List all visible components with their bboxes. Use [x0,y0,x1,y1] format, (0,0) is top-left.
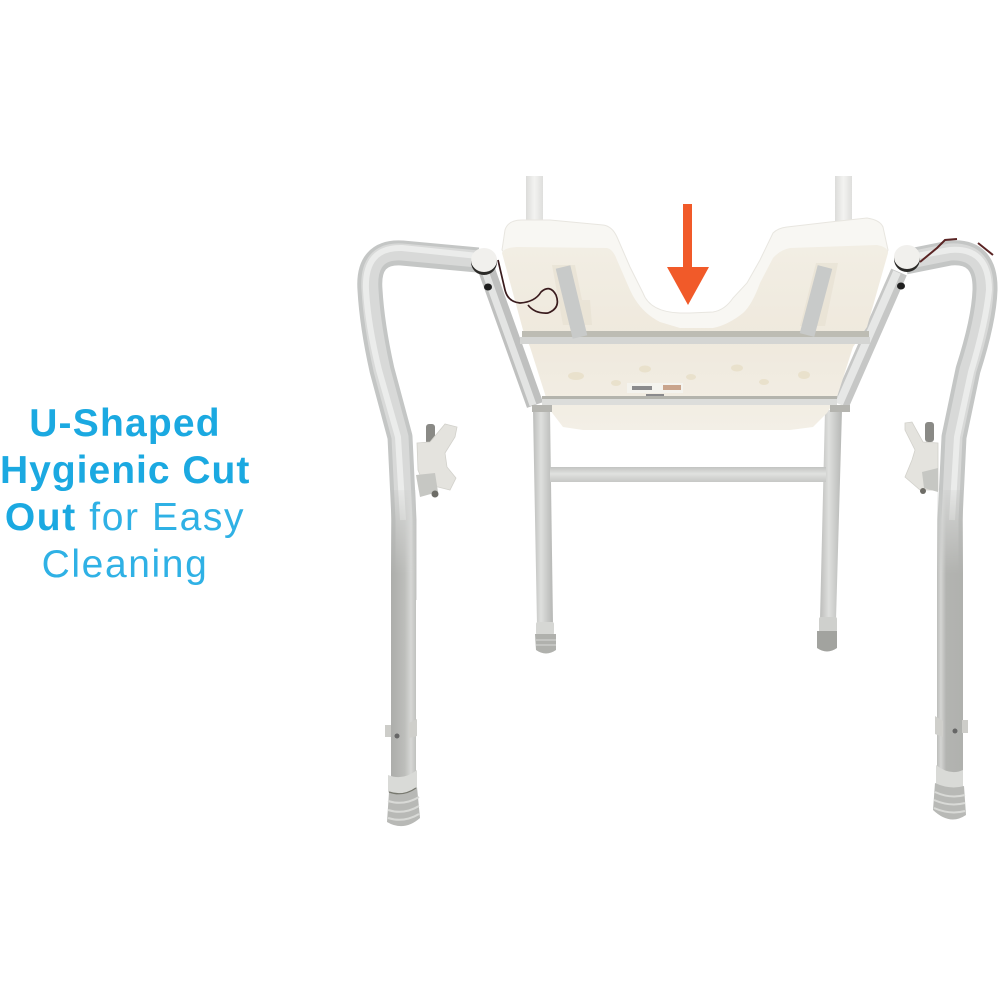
left seat tube [563,267,580,337]
mounting recesses [552,265,592,325]
upper cross bar [520,331,870,344]
right armrest and leg [905,250,989,819]
right seat tube [807,267,825,335]
seat top rim [502,218,888,340]
caption text [0,402,250,586]
hinge brackets and wires [471,239,993,412]
left armrest and leg [366,248,478,826]
shower chair photo [357,176,998,826]
plug bumps [568,364,810,386]
caption text: Out for Easy [5,496,245,539]
inner front legs and crossbar [533,410,842,654]
lower cross bar [542,396,837,405]
seat underside [502,245,888,430]
right wing-nut clamp [905,422,938,494]
product label sticker [627,383,683,399]
caption text: Cleaning [42,543,208,586]
arrow pointing at cut-out [667,204,709,305]
left side seat frame tube [485,271,535,405]
right side seat frame tube [839,272,899,404]
left wing-nut clamp [416,424,457,498]
caption text: Hygienic Cut [0,449,250,492]
u-shaped seat [502,218,888,430]
back posts [526,176,852,226]
caption text: U-Shaped [29,402,221,445]
